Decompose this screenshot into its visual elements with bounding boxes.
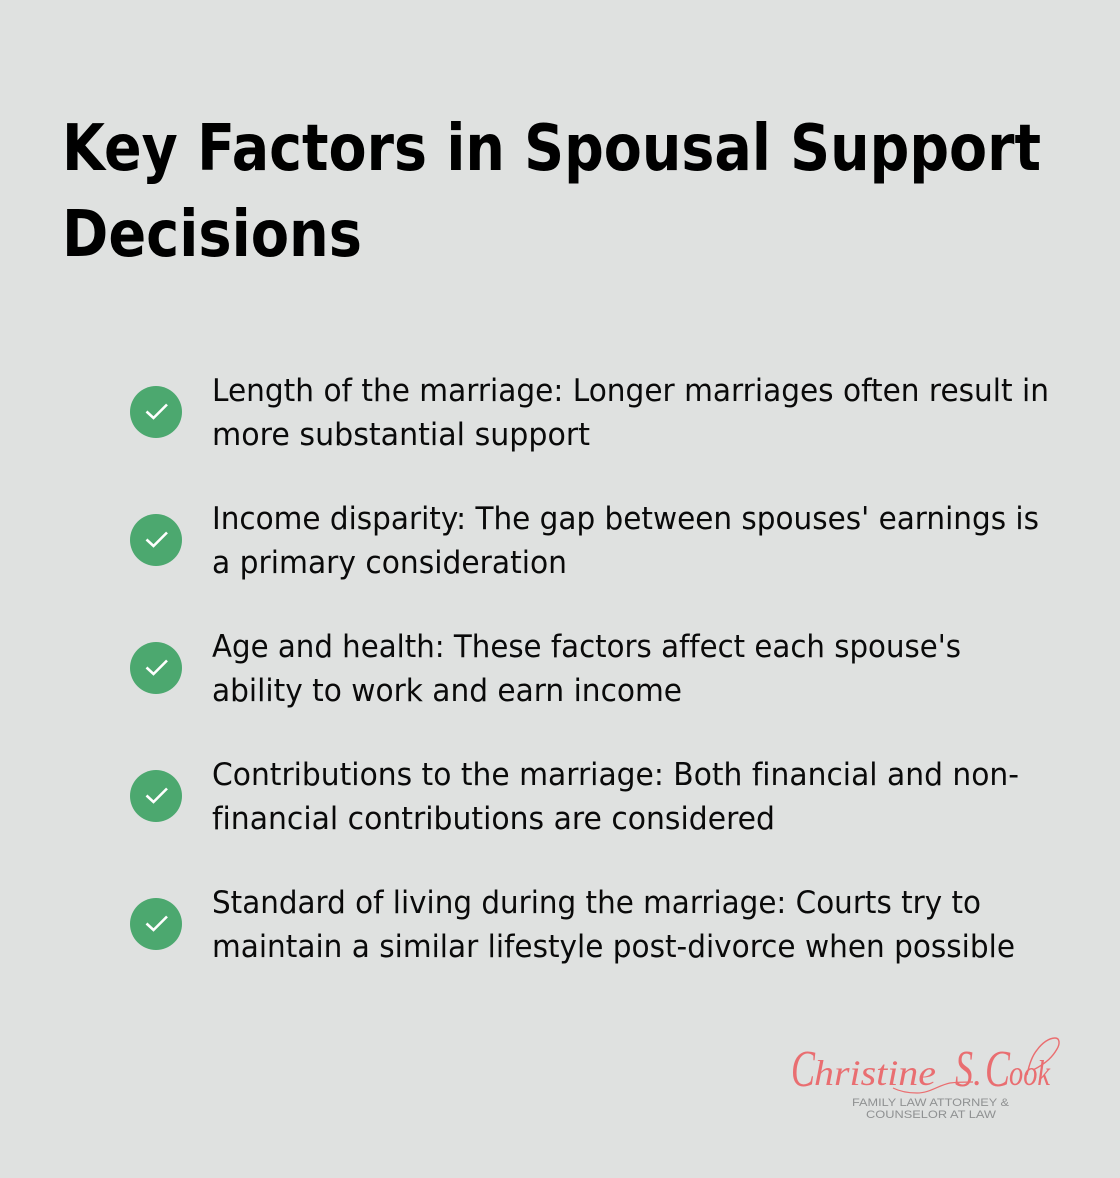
logo: Christine S. Cook: [791, 1038, 1059, 1121]
list item: income disparity: [130, 501, 1039, 581]
logo: Christine S. Cook: COUNSELOR AT LAW: [866, 1109, 997, 1121]
title: Decisions: [62, 198, 362, 272]
list item: standard of living: [130, 885, 1015, 965]
icon: check circle: [130, 642, 182, 694]
title: [62, 112, 1041, 272]
text: contributions: [212, 757, 1019, 837]
logo: Christine S. Cook: ook: [1009, 1053, 1051, 1093]
text: standard of living: Standard of living during the marriage: Courts try to: [212, 885, 981, 921]
text: income disparity: a primary consideration: [212, 545, 567, 581]
icon: check circle: [130, 514, 182, 566]
icon: check circle: [130, 770, 182, 822]
text: age and health: ability to work and earn income: [212, 673, 682, 709]
list item: age and health: [130, 629, 961, 709]
text: length of the marriage: Length of the marriage: Longer marriages often result in: [212, 373, 1049, 409]
text: contributions: financial contributions are considered: [212, 801, 775, 837]
text: contributions: Contributions to the marriage: Both financial and non-: [212, 757, 1019, 793]
list item: length of the marriage: [130, 373, 1049, 453]
text: standard of living: maintain a similar lifestyle post-divorce when possible: [212, 929, 1015, 965]
text: age and health: [212, 629, 961, 709]
text: length of the marriage: more substantial support: [212, 417, 590, 453]
text: income disparity: [212, 501, 1039, 581]
text: income disparity: Income disparity: The gap between spouses' earnings is: [212, 501, 1039, 537]
logo: Christine S. Cook: C: [791, 1041, 816, 1098]
text: age and health: Age and health: These factors affect each spouse's: [212, 629, 961, 665]
logo: Christine S. Cook: hristine: [814, 1053, 936, 1093]
logo: Christine S. Cook: C: [985, 1041, 1011, 1098]
logo: Christine S. Cook: FAMILY LAW ATTORNEY &: [852, 1097, 1010, 1109]
logo: Christine S. Cook: S: [955, 1041, 973, 1098]
logo: Christine S. Cook: .: [973, 1053, 982, 1093]
icon: check circle: [130, 898, 182, 950]
text: length of the marriage: [212, 373, 1049, 453]
icon: check circle: [130, 386, 182, 438]
list item: contributions: [130, 757, 1019, 837]
text: standard of living: [212, 885, 1015, 965]
